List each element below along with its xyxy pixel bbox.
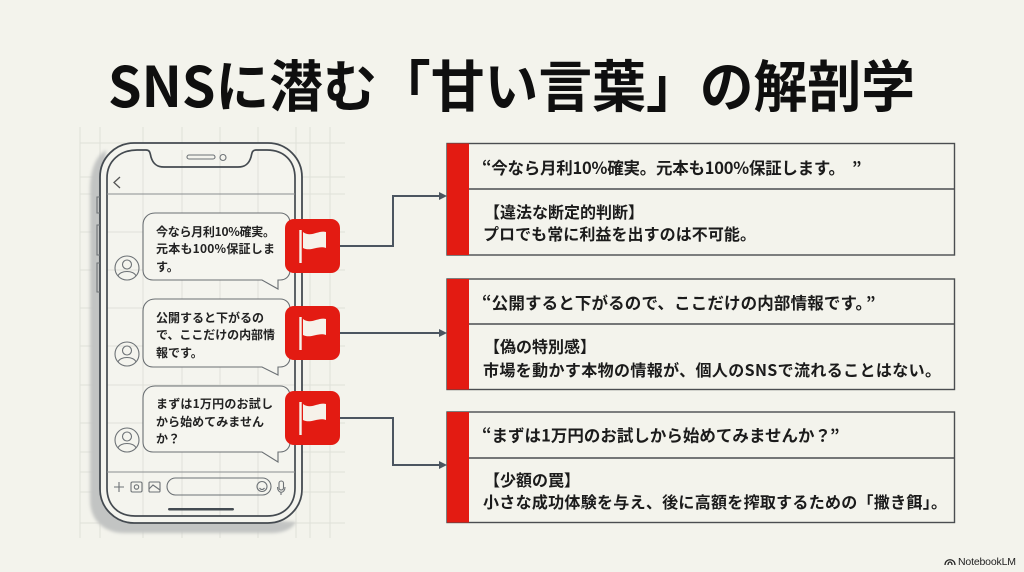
title: SNSに潜む「甘い言葉」の解剖学 [108,43,915,124]
arrow: flag 1 to card 1 [339,192,447,246]
panel: card 1: 【違法な断定的判断】 [484,199,644,223]
home indicator [168,508,234,510]
panel: smartphone [90,143,302,533]
chat bubble 2 [143,299,290,375]
speaker and camera [187,154,226,160]
avatar 2 [115,342,139,366]
panel: card 1: “今なら月利10%確実。元本も100%保証します。 [482,155,845,179]
panel: card 1: プロでも常に利益を出すのは不可能。 [483,221,756,245]
chat bubble 3 [143,386,290,462]
side buttons [97,197,100,292]
chat bubble 1: 元本も100%保証しま [156,240,275,257]
panel: card 3: “まずは1万円のお試しから始めてみませんか？ [482,422,831,446]
avatar 1 [115,256,139,280]
back chevron [114,177,120,188]
chat bubble 2: 公開すると下がるの [156,309,264,326]
chat bubble 2: 報です。 [156,344,203,361]
icon: red flag 2 [285,306,340,360]
logo: NotebookLM: NotebookLM [958,556,1016,568]
avatar 3 [115,428,139,452]
panel: card 2: “公開すると下がるので、ここだけの内部情報です。 [482,290,872,314]
phone grid inside [107,150,295,516]
chat bubble 2: で、ここだけの内部情 [156,326,275,343]
chat bubble 1: 今なら月利10%確実。 [156,223,275,240]
panel: card 3: 【少額の罠】 [484,467,580,491]
chat bubble 1: す。 [156,258,179,275]
phone drop shadow [90,150,296,533]
panel: card 3 [447,412,955,522]
phone body [100,143,302,523]
arrow: flag 2 to card 2 [340,329,447,337]
header divider [107,194,295,472]
panel: card 3: 小さな成功体験を与え、後に高額を搾取するための「撒き餌」。 [483,489,947,513]
panel: card 2: 市場を動かす本物の情報が、個人のSNSで流れることはない。 [483,357,941,381]
input bar icons [114,478,285,495]
arrow: flag 3 to card 3 [339,418,447,469]
phone screen outline with notch [107,150,295,516]
chat bubble 3: から始めてみません [156,413,264,430]
panel: card 2 [447,279,955,390]
icon: red flag 1 [285,219,340,273]
panel: card 1 [447,144,955,255]
icon: red flag 3 [285,391,340,445]
chat bubble 1 [143,213,290,289]
panel: card 1: ” [852,155,861,179]
chat bubble 3: か？ [156,430,180,447]
panel: card 2: ” [866,290,875,314]
background grid [80,127,345,538]
panel: card 2: 【偽の特別感】 [484,334,596,358]
chat bubble 3: まずは1万円のお試し [156,395,273,412]
panel: card 3: ” [830,422,839,446]
